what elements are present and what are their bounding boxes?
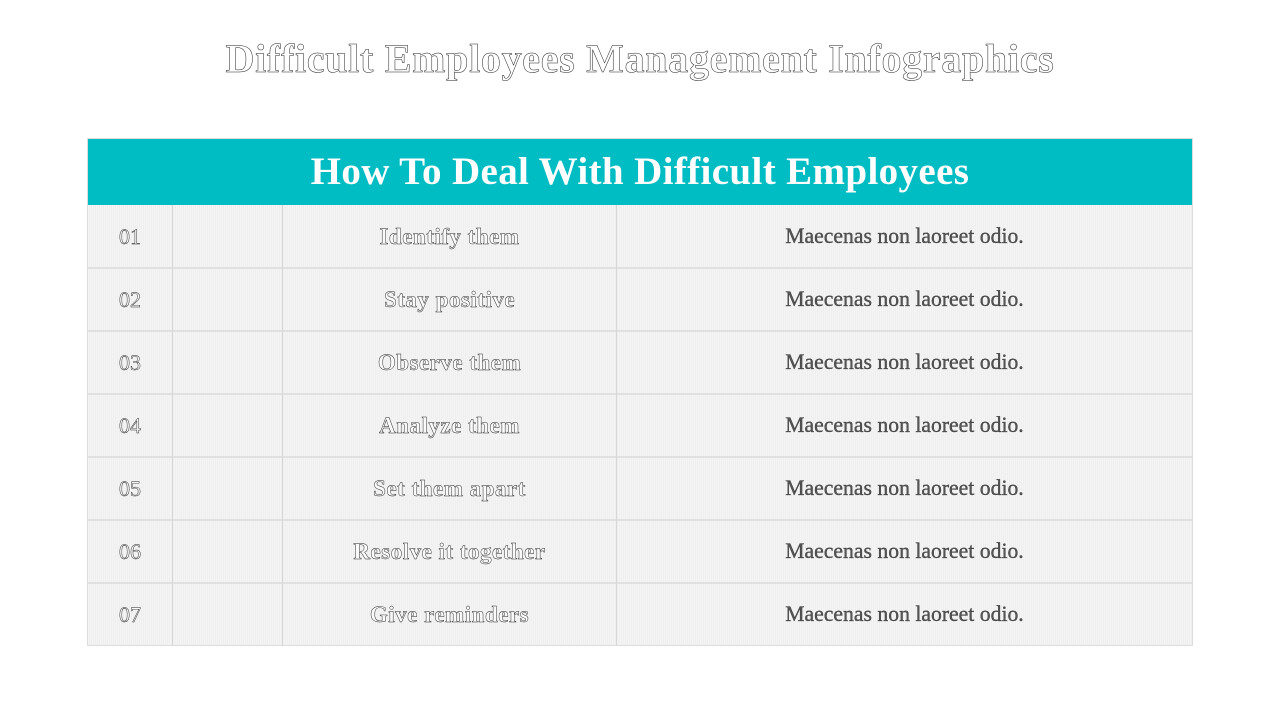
row 04: Analyze them — [379, 413, 520, 438]
row 03: 03 — [119, 350, 141, 375]
row 07: Give reminders — [370, 602, 529, 627]
row 04: 04 — [119, 413, 141, 438]
row 05: Maecenas non laoreet odio. — [785, 476, 1024, 500]
row 06 — [88, 521, 1192, 584]
row 04 — [88, 395, 1192, 458]
panel: table — [87, 138, 1193, 646]
row 04: Maecenas non laoreet odio. — [785, 413, 1024, 437]
table heading: How To Deal With Difficult Employees — [311, 150, 969, 193]
row 03: Observe them — [378, 350, 521, 375]
row 05 — [88, 458, 1192, 521]
row 06: Maecenas non laoreet odio. — [785, 539, 1024, 563]
table heading — [88, 139, 1192, 205]
row 01: Identify them — [379, 224, 520, 249]
row 06: 06 — [119, 539, 141, 564]
row 03 — [88, 332, 1192, 395]
title: Difficult Employees Management Infographics — [226, 36, 1054, 81]
row 01: Maecenas non laoreet odio. — [785, 224, 1024, 248]
row 02: Maecenas non laoreet odio. — [785, 287, 1024, 311]
row 02: 02 — [119, 287, 141, 312]
row 01 — [88, 206, 1192, 269]
row 05: 05 — [119, 476, 141, 501]
row 02: Stay positive — [384, 287, 515, 312]
row 03: Maecenas non laoreet odio. — [785, 350, 1024, 374]
row 01: 01 — [119, 224, 141, 249]
row 05: Set them apart — [373, 476, 526, 501]
row 07: 07 — [119, 602, 141, 627]
row 07 — [119, 583, 1024, 645]
row 07: Maecenas non laoreet odio. — [785, 602, 1024, 626]
row 06: Resolve it together — [353, 539, 546, 564]
row 02 — [88, 269, 1192, 332]
